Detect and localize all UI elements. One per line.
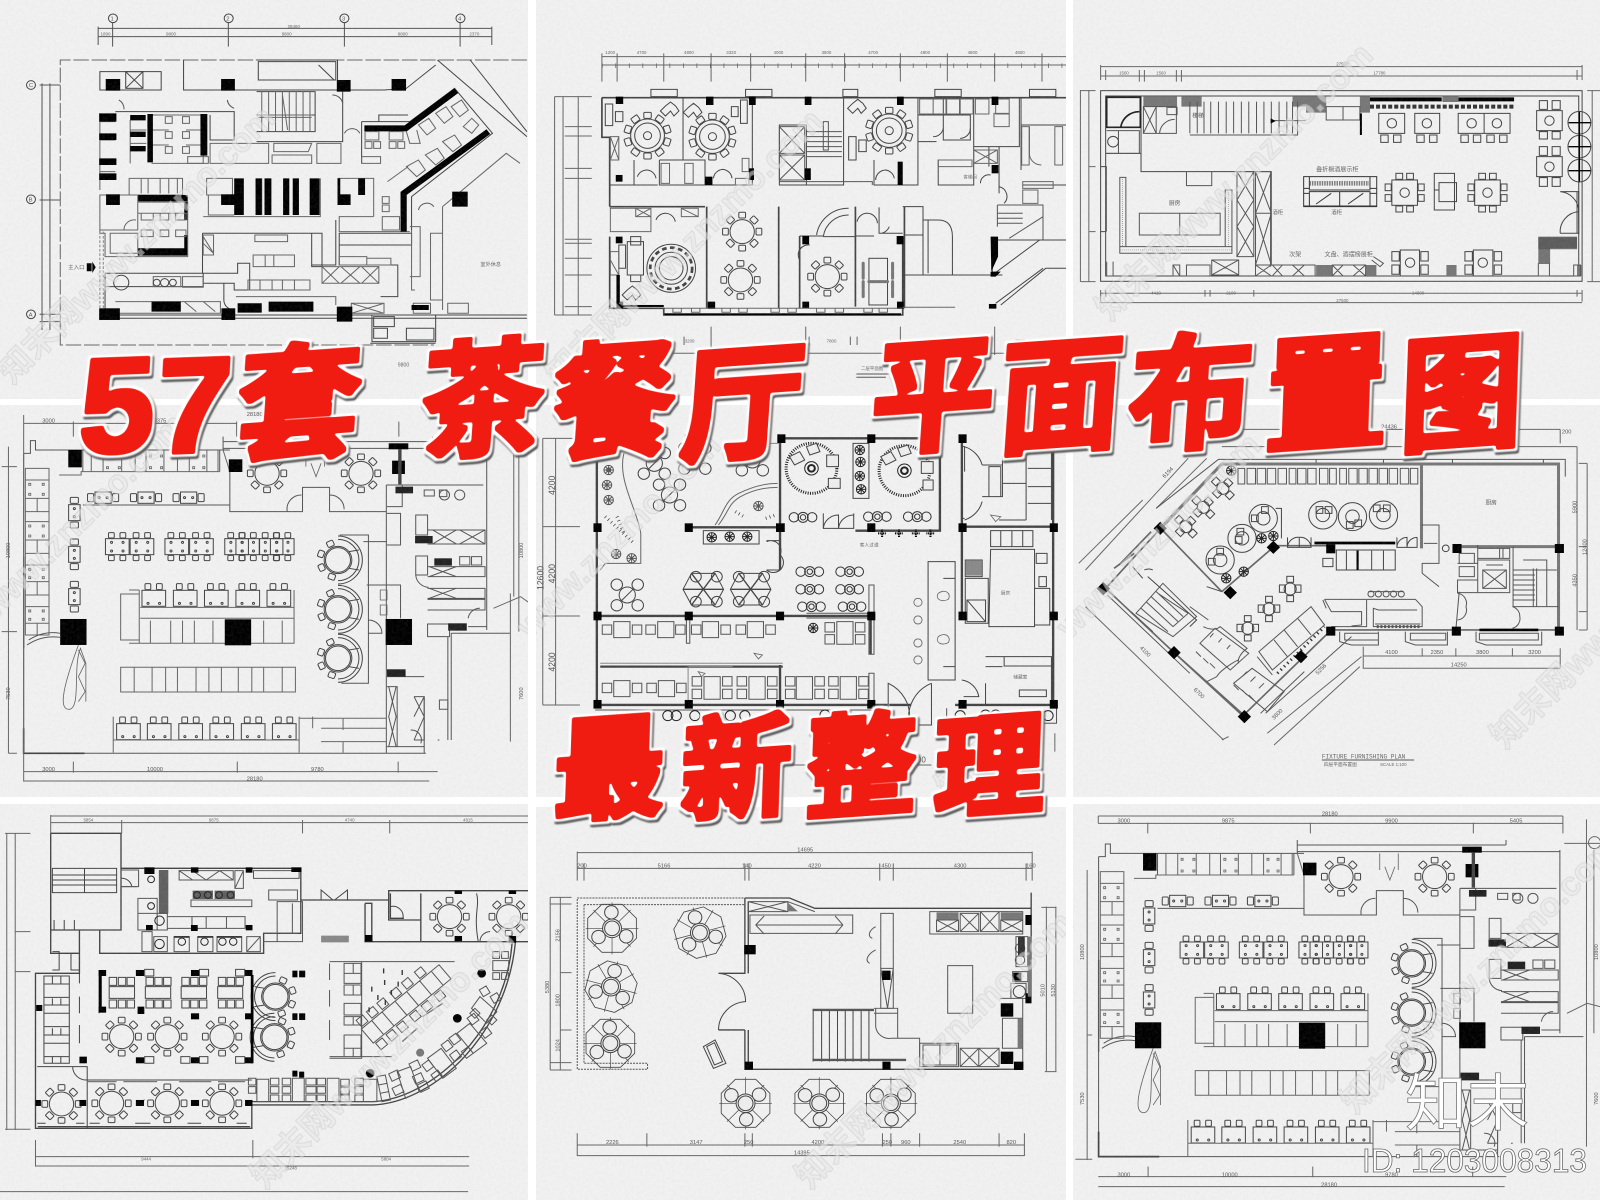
dimensions: 2370 (469, 32, 480, 37)
dimensions: 160 (1026, 864, 1036, 870)
kitchen counter (1120, 172, 1232, 253)
stair (813, 1010, 869, 1062)
watermarks: www.znzmo.com (1048, 426, 1268, 646)
central booth (1323, 550, 1395, 570)
subtitle: 最新整理: 最 (551, 703, 667, 837)
dimensions: 7600 (1594, 1092, 1600, 1105)
main doors (767, 541, 979, 725)
walls (1101, 91, 1582, 281)
garden (600, 453, 778, 570)
entrance: 主入口 (68, 263, 85, 271)
dimensions (1080, 61, 1600, 303)
panel: floor plan middle centre: 储藏室 (1013, 673, 1028, 680)
kitchen (121, 870, 303, 952)
panel: floor plan middle right: 厨房 (1485, 498, 1497, 506)
black columns (616, 97, 998, 315)
watermarks: 知末网www.znzmo.com (789, 904, 1081, 1196)
dimensions: 10800 (6, 543, 12, 558)
title: 57套 茶餐厅 平面布置图: 7 (153, 329, 236, 482)
stairs (1131, 583, 1197, 637)
dimensions: 28180 (247, 777, 263, 783)
dimensions: A (29, 312, 33, 318)
top left seating (100, 113, 203, 190)
toilets rooms (610, 99, 1063, 275)
dimensions: 4220 (808, 864, 821, 870)
lower diagonal booths (1196, 607, 1542, 713)
dimensions: 3000 (42, 419, 55, 425)
dimensions: 3200 (685, 338, 695, 343)
dimensions: 14695 (797, 848, 813, 854)
subtitle: 最新整理: 新 (678, 703, 794, 837)
display and tiles (1360, 97, 1514, 135)
dimensions (0, 815, 530, 1192)
dimensions: 820 (1006, 1140, 1016, 1146)
panel: floor plan top right: 叠折橱酒展示柜 (1316, 166, 1358, 174)
diagonal bars (364, 91, 488, 232)
title: 57套 茶餐厅 平面布置图: 面 (994, 322, 1128, 472)
dimensions: 9800 (282, 32, 292, 37)
dimensions: 5380 (545, 981, 551, 993)
dimensions: 9875 (1222, 819, 1235, 825)
dimensions: 14395 (794, 1151, 810, 1157)
columns (99, 79, 468, 322)
dimensions: 960 (901, 1140, 911, 1146)
panel: floor plan middle left (2, 412, 530, 783)
middle seating (129, 178, 410, 232)
dimensions: 12600 (535, 566, 545, 590)
dimensions: 4300 (954, 864, 967, 870)
dimensions (1079, 424, 1588, 745)
tables and walls (24, 437, 510, 753)
dimensions (545, 848, 1057, 1157)
dimensions: 4200 (908, 756, 926, 765)
subtitle: 最新整理: 整 (803, 701, 919, 835)
dimensions: 28460 (288, 24, 301, 29)
title block (1322, 753, 1414, 768)
title: 57套 茶餐厅 平面布置图: 餐 (547, 328, 681, 478)
title: 57套 茶餐厅 平面布置图: 厅 (676, 330, 810, 480)
dimensions: 10000 (147, 767, 163, 773)
right seating cluster (330, 962, 455, 1058)
dimensions (1075, 811, 1600, 1189)
dimensions: 9900 (1385, 819, 1398, 825)
cafe tables (611, 442, 771, 611)
watermark logo: 知末 (1405, 1070, 1529, 1139)
dimensions: 4700 (868, 50, 879, 55)
dimensions: 3200 (1528, 650, 1541, 656)
dimensions: 28180 (1321, 1183, 1337, 1189)
dimensions: 4740 (345, 817, 355, 822)
dimensions: 9444 (141, 1157, 152, 1162)
dimensions: 9875 (209, 817, 219, 822)
dimensions: 10800 (1080, 944, 1086, 960)
title block: SCALE 1:100 (1380, 762, 1407, 767)
panel: floor plan top right: 次架 (1289, 251, 1301, 259)
dimensions: 2540 (953, 1140, 966, 1146)
dimensions: 3600 (1271, 708, 1284, 721)
bar counter (1323, 592, 1422, 627)
dimensions: 5854 (83, 817, 94, 822)
dimensions: 4000 (774, 50, 784, 55)
dimensions: 5010 (1041, 984, 1047, 997)
dimensions: 2156 (556, 929, 562, 942)
dimensions: 10800 (519, 543, 525, 558)
dimensions: 4800 (684, 50, 694, 55)
dimensions: 4700 (637, 50, 647, 55)
title: 57套 茶餐厅 平面布置图 (76, 320, 1526, 482)
dimensions: 9780 (311, 767, 324, 773)
panel: floor plan top left (27, 14, 527, 369)
dimensions: 140 (742, 864, 752, 870)
dimensions: C (29, 83, 33, 89)
dimensions: 250 (744, 1140, 753, 1146)
dimensions: 3800 (1015, 338, 1026, 343)
door and mat (703, 973, 746, 1068)
columns (593, 434, 1058, 709)
dimensions (555, 50, 1066, 377)
dimensions: 14300 (1412, 291, 1425, 296)
panel: floor plan top centre: 客梯间 (964, 173, 977, 180)
dimensions: 2100 (1226, 291, 1237, 296)
dimensions: 二层平面图 (861, 366, 883, 372)
dimensions: 1200 (605, 50, 616, 55)
dimensions (535, 438, 1055, 767)
title: 57套 茶餐厅 平面布置图: 置 (1262, 321, 1391, 470)
watermarks: 知末网 (929, 707, 1028, 806)
dimensions: 450 (881, 864, 891, 870)
dimensions: 28180 (247, 412, 263, 418)
bar and kitchen (928, 531, 1051, 705)
round tables (605, 99, 913, 305)
dimensions: 4200 (547, 652, 557, 672)
curved booths (248, 952, 509, 1102)
dimensions: 4200 (811, 1140, 824, 1146)
dimensions: 4410 (1151, 291, 1161, 296)
dimensions: 10800 (1594, 944, 1600, 960)
private rooms (786, 443, 930, 496)
dimensions: 5900 (1572, 501, 1578, 513)
dimensions: 1024 (556, 1039, 562, 1052)
dimensions: 4200 (547, 564, 557, 583)
dimensions: 1560 (1119, 71, 1129, 76)
booth rows (602, 585, 874, 702)
stairs (1143, 102, 1360, 135)
dimensions: 14250 (1451, 663, 1467, 669)
walls (100, 60, 527, 230)
dimensions: 5804 (381, 1157, 392, 1162)
kitchen and service (105, 220, 412, 310)
stairs and lifts (779, 122, 1043, 240)
booths along top (1238, 468, 1418, 484)
dimensions: 12400 (1582, 539, 1588, 555)
umbrellas (579, 901, 917, 1129)
columns (744, 915, 1032, 1070)
dimensions: 3000 (1117, 1173, 1130, 1179)
dimensions: 2226 (606, 1140, 619, 1146)
title block: FIXTURE FURNISHING PLAN (1322, 753, 1406, 760)
watermarks: 知末网www.znzmo.com (539, 102, 831, 394)
dimensions: 7600 (519, 687, 525, 700)
dimensions: 3800 (822, 50, 832, 55)
walls (35, 833, 530, 1128)
cafe tables (1379, 101, 1591, 276)
panel: floor plan middle centre: 厨房 (1001, 589, 1011, 596)
dimensions: 5130 (1051, 984, 1057, 997)
dimensions: 9780 (1385, 1173, 1398, 1179)
cafe tables diagonal (1169, 472, 1398, 641)
dimensions: B (29, 197, 33, 203)
dimensions: 2 (226, 16, 230, 22)
outer walls (1161, 464, 1560, 630)
dimensions (2, 412, 530, 783)
panel: floor plan middle centre: 客人过道 (860, 542, 879, 549)
title: 57套 茶餐厅 平面布置图: 套 (232, 330, 366, 480)
dimensions: 28180 (1322, 811, 1338, 817)
core lifts (1421, 525, 1559, 630)
dimensions: 3800 (1476, 650, 1489, 656)
dimensions: 27500 (1336, 61, 1349, 66)
walls (602, 98, 1066, 315)
wine display (1304, 177, 1377, 207)
dimensions: 7530 (1080, 1092, 1086, 1105)
tables (42, 897, 528, 1123)
panel: floor plan top centre (555, 50, 1066, 377)
dimensions: 4100 (1138, 645, 1151, 659)
dimensions: 250 (882, 1140, 892, 1146)
black columns (35, 867, 516, 1106)
dimensions: 24436 (1381, 424, 1397, 430)
dimensions: 4800 (968, 50, 978, 55)
dimensions: 10375 (150, 419, 166, 425)
black stars (878, 529, 935, 537)
dimensions: 3320 (726, 50, 737, 55)
panel: floor plan top right: 文盘、酒摆榜展柜 (1325, 251, 1373, 259)
panel: floor plan middle centre (535, 434, 1058, 767)
dimensions: 3000 (42, 767, 55, 773)
dimensions: 4800 (1015, 50, 1025, 55)
dimensions: 4800 (920, 50, 931, 55)
title: 57套 茶餐厅 平面布置图: 平 (866, 322, 1000, 472)
panel: floor plan top right: 酒柜 (1272, 208, 1284, 216)
dimensions: 2350 (1431, 650, 1443, 656)
panel: floor plan bottom left (0, 815, 530, 1192)
tables and walls (1099, 840, 1583, 1157)
dimensions: 200 (577, 864, 587, 870)
panel: floor plan top right: 酒柜 (1331, 208, 1343, 216)
walls (597, 438, 1053, 705)
dimensions: 1800 (556, 994, 562, 1007)
columns (1097, 522, 1564, 723)
dimensions: 5166 (658, 864, 670, 870)
dimensions: 7800 (827, 338, 837, 343)
watermark id: ID: 1203008313 (1362, 1142, 1587, 1179)
dimensions: 3 (342, 16, 345, 22)
dimensions: 27500 (1336, 298, 1349, 303)
watermarks: 知末网www.znzmo.com (1089, 36, 1381, 328)
panel: floor plan top right (1080, 61, 1600, 303)
planter strip (595, 708, 1057, 723)
panel: floor plan bottom right (1075, 811, 1600, 1189)
panel: floor plan top right: 楼梯 (1192, 111, 1204, 119)
title: 57套 茶餐厅 平面布置图: 图 (1397, 321, 1526, 470)
dimensions: 1890 (101, 32, 111, 37)
dimensions: 3147 (690, 1140, 703, 1146)
panel: floor plan middle right (1079, 424, 1588, 768)
dimensions: 4815 (463, 817, 473, 822)
dimensions: 17780 (1373, 71, 1386, 76)
dimensions: 3000 (1117, 819, 1130, 825)
subtitle: 最新整理 (551, 701, 1047, 837)
dimensions: 5256 (1315, 663, 1328, 676)
dimensions: 7530 (6, 687, 12, 700)
panel: floor plan top left: 室外休息 (480, 261, 501, 268)
dimensions: 4 (458, 16, 462, 22)
title: 57套 茶餐厅 平面布置图: 茶 (416, 326, 550, 476)
dimensions: 6194 (1162, 467, 1175, 480)
dimensions: 1560 (1156, 71, 1166, 76)
subtitle: 最新整理: 理 (931, 701, 1047, 835)
dashed site boundary (60, 60, 527, 345)
watermarks: www.znzmo.com (508, 426, 728, 646)
title: 57套 茶餐厅 平面布置图: 布 (1124, 320, 1258, 470)
dimensions: 9800 (398, 363, 409, 369)
dimensions: 15248 (285, 1165, 297, 1170)
panel: floor plan bottom centre (545, 848, 1057, 1157)
dimensions: 200 (1562, 429, 1571, 435)
dimensions: 10000 (1222, 1173, 1238, 1179)
garden border (577, 898, 745, 1069)
dimensions: 5405 (1510, 819, 1522, 825)
dimensions: 4200 (547, 476, 557, 495)
dimensions: 9800 (398, 32, 408, 37)
watermarks: 知末网www.znzmo.com (244, 904, 536, 1196)
panel: floor plan top right: 厨房 (1169, 199, 1181, 207)
dimensions: 1 (111, 16, 114, 22)
dimensions: 4350 (1572, 574, 1578, 587)
title block: 四层平面布置图 (1324, 761, 1357, 768)
dimensions: 3736 (961, 338, 972, 343)
title: 57套 茶餐厅 平面布置图: 5 (76, 329, 159, 482)
dimensions (27, 14, 492, 369)
dimensions: 6700 (1192, 687, 1205, 700)
building walls (719, 893, 1031, 1069)
dimensions: 4100 (1385, 650, 1398, 656)
dimensions: 9800 (166, 32, 176, 37)
